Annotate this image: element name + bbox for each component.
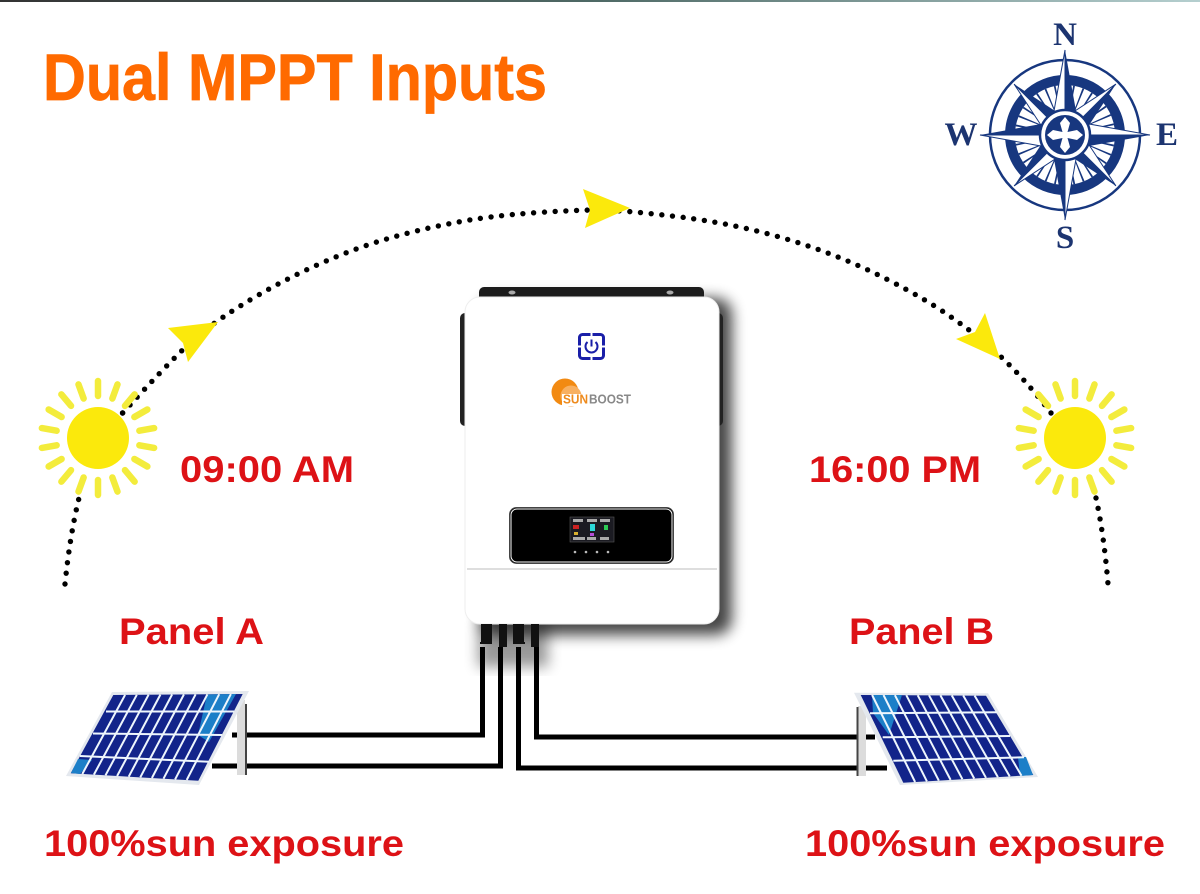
label: 09:00 AM: 09:00 AM	[180, 449, 354, 490]
frame	[66, 691, 249, 785]
glare	[872, 695, 1033, 776]
solar panel A	[66, 691, 249, 785]
stand	[237, 700, 247, 775]
sun path: dotted arc	[65, 210, 1108, 584]
cells	[861, 695, 1033, 783]
cells	[71, 694, 243, 781]
inverter body	[465, 297, 719, 624]
top edge strip	[0, 0, 1200, 2]
compass rose: W	[944, 117, 978, 153]
cables: panel B	[518, 647, 887, 768]
touch buttons	[574, 551, 609, 553]
arrow: afternoon	[956, 313, 1000, 359]
glare	[71, 694, 236, 774]
label: Panel B: Panel B	[849, 611, 994, 652]
label: 16:00 PM: 16:00 PM	[809, 449, 981, 490]
inverter	[460, 287, 732, 667]
compass rose	[944, 17, 1178, 256]
body seam	[467, 568, 717, 570]
title: Dual MPPT Inputs	[43, 40, 547, 114]
brand logo	[552, 378, 631, 406]
solar panel B	[854, 693, 1038, 785]
arrow: morning	[168, 322, 218, 362]
cell grid	[870, 695, 1024, 782]
stand	[856, 706, 866, 776]
compass rose: N	[1053, 17, 1077, 53]
cables: panel A	[212, 647, 500, 766]
inverter shadow	[478, 298, 732, 667]
cell grid	[80, 694, 234, 780]
frame	[854, 693, 1038, 785]
mounting bracket	[479, 287, 704, 307]
power button icon	[577, 332, 606, 361]
label: Panel A: Panel A	[119, 611, 264, 652]
sun: morning	[42, 381, 154, 495]
sun: afternoon	[1019, 381, 1131, 495]
LCD screen	[570, 517, 614, 542]
arrow: noon	[583, 189, 630, 228]
caption: left sun exposure: 100%sun exposure	[44, 823, 404, 864]
display panel	[510, 508, 674, 564]
compass rose: E	[1156, 117, 1178, 153]
compass rose: S	[1056, 220, 1074, 256]
brand logo: BOOST	[589, 392, 631, 406]
cable connectors	[480, 624, 539, 647]
brand logo: SUN	[563, 392, 588, 406]
caption: right sun exposure: 100%sun exposure	[805, 823, 1165, 864]
side flanges	[460, 313, 723, 426]
